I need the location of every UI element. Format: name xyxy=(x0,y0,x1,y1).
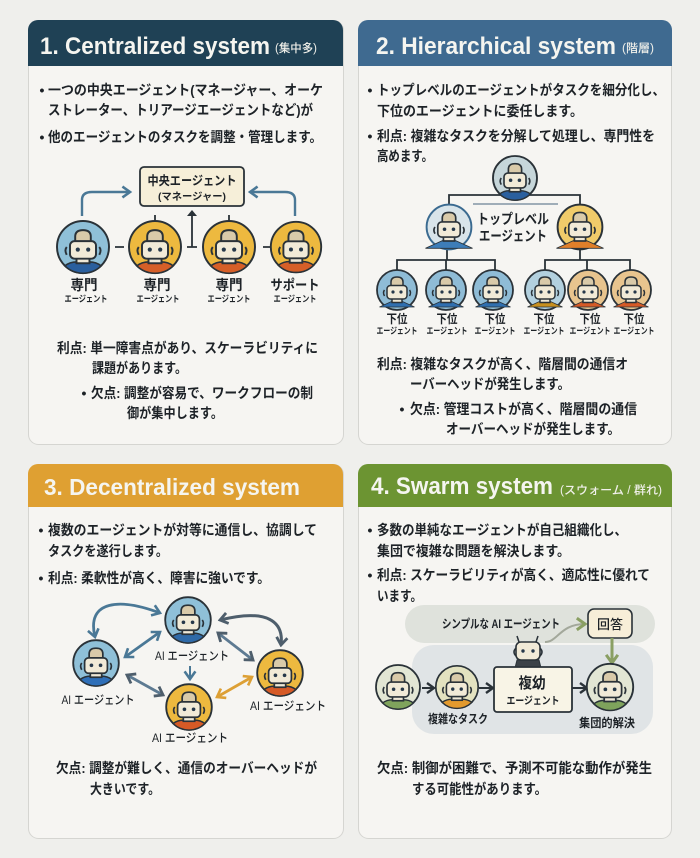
label: top level agent xyxy=(477,211,549,244)
text block: pros and cons: オーバーヘッドが発生します。 xyxy=(446,421,620,437)
label: top level agent: エージェント xyxy=(479,228,547,244)
text block: description: 複数のエージェントが対等に通信し、協調して xyxy=(48,522,317,538)
labels: agents xyxy=(64,277,320,304)
header: swarm system: 4. Swarm system xyxy=(371,473,553,500)
labels: agents: エージェント xyxy=(136,294,180,304)
label: simple agent: シンプルな AI エージェント xyxy=(442,617,560,631)
labels: task and solution xyxy=(428,711,635,730)
labels: agents: 専門 xyxy=(216,277,242,293)
text block: description: • xyxy=(368,128,373,144)
text block: cons: する可能性があります。 xyxy=(412,781,547,797)
labels: sub agents: 下位 xyxy=(534,311,554,326)
text block: pros and cons: 課題があります。 xyxy=(92,360,187,376)
text block: description xyxy=(368,82,665,164)
text block: description xyxy=(39,522,317,586)
panel: swarm system xyxy=(358,464,672,838)
text block: description: 利点: 複雑なタスクを分解して処理し、専門性を xyxy=(377,128,655,144)
icon: sub agent 5 xyxy=(568,270,608,310)
text block: pros and cons: 欠点: 調整が容易で、ワークフローの制 xyxy=(91,385,313,401)
panel: centralized system xyxy=(28,20,344,444)
text block: description: 下位のエージェントに委任します。 xyxy=(377,103,583,119)
arrow: box to solution xyxy=(572,687,587,689)
box: central agent xyxy=(140,167,244,206)
header: hierarchical system xyxy=(358,20,672,66)
icon: agent 1 xyxy=(57,221,109,273)
icon: agent 2 xyxy=(129,221,181,273)
labels: agents: AI エージェント xyxy=(250,699,326,713)
icon: top agent xyxy=(165,597,211,643)
icon: sub agent 1 xyxy=(377,270,417,310)
labels: agents: 専門 xyxy=(144,277,170,293)
labels: sub agents: 下位 xyxy=(484,311,506,326)
icon: small robot xyxy=(514,636,542,668)
text block: description: 高めます。 xyxy=(377,148,433,164)
header: hierarchical system: (階層) xyxy=(622,42,654,55)
text block: description: トップレベルのエージェントがタスクを細分化し、 xyxy=(377,82,665,98)
icon: mid agent yellow xyxy=(556,205,604,249)
icon: agent orange xyxy=(436,666,478,708)
text block: description: • xyxy=(40,129,45,145)
header: swarm system xyxy=(358,464,672,507)
text block: pros and cons: • xyxy=(82,385,87,401)
text block: cons: 欠点: 制御が困難で、予測不可能な動作が発生 xyxy=(377,760,652,776)
text block: description: 他のエージェントのタスクを調整・管理します。 xyxy=(48,129,322,145)
text block: pros and cons: 利点: 単一障害点があり、スケーラビリティに xyxy=(57,340,318,356)
labels: sub agents: 下位 xyxy=(580,311,600,326)
icon: left agent xyxy=(73,640,119,686)
arrow: curved right xyxy=(220,616,281,645)
diagram: peer to peer agents xyxy=(62,597,326,745)
text block: description: • xyxy=(39,570,44,586)
text block: description: 集団で複雑な問題を解決します。 xyxy=(377,543,570,559)
labels: agents: エージェント xyxy=(208,294,250,304)
header: centralized system xyxy=(28,20,343,66)
labels: sub agents: エージェント xyxy=(614,326,654,336)
box: complex agent: 複幼 xyxy=(518,675,546,692)
box: central agent: (マネージャー) xyxy=(158,191,226,203)
icon: agent 3 xyxy=(203,221,255,273)
panel: hierarchical system xyxy=(358,20,672,444)
box: answer: 回答 xyxy=(597,617,623,632)
header: centralized system: 1. Centralized system xyxy=(40,33,270,60)
text block: cons xyxy=(56,760,317,797)
text block: description: 多数の単純なエージェントが自己組織化し、 xyxy=(377,522,627,538)
labels: agents: エージェント xyxy=(274,294,316,304)
labels: task and solution: 集団的解決 xyxy=(579,715,635,730)
arrow: curved left xyxy=(94,604,160,637)
arrow: left to bottom xyxy=(127,675,163,695)
labels: agents: AI エージェント xyxy=(155,649,229,663)
text block: cons xyxy=(377,760,652,797)
background: upper band xyxy=(405,605,655,643)
text block: description: 一つの中央エージェント(マネージャー、オーケ xyxy=(48,82,323,98)
header: decentralized system xyxy=(28,464,343,507)
labels: sub agents: エージェント xyxy=(524,326,564,336)
icon: sub agent 2 xyxy=(426,270,466,310)
text block: description xyxy=(368,522,650,604)
labels: sub agents: エージェント xyxy=(570,326,610,336)
text block: description: • xyxy=(368,82,373,98)
header: swarm system: (スウォーム / 群れ) xyxy=(560,483,662,497)
arrow: task to box xyxy=(479,687,493,689)
text block: pros and cons xyxy=(377,356,637,437)
icon: agent 4 xyxy=(271,222,321,272)
arrow: right worker to manager xyxy=(250,192,295,216)
icon: mid agent blue xyxy=(425,205,473,249)
box: central agent: 中央エージェント xyxy=(148,173,236,188)
text block: description: • xyxy=(40,82,45,98)
labels: task and solution: 複雑なタスク xyxy=(428,711,488,726)
text block: description: • xyxy=(39,522,44,538)
background: lower band xyxy=(412,645,653,734)
text block: pros and cons: 利点: 複雑なタスクが高く、階層間の通信オ xyxy=(377,356,628,372)
labels: sub agents: 下位 xyxy=(436,311,458,326)
text block: cons: 欠点: 調整が難しく、通信のオーバーヘッドが xyxy=(56,760,317,776)
text block: description xyxy=(40,82,323,145)
text block: pros and cons: 欠点: 管理コストが高く、階層間の通信 xyxy=(410,401,637,417)
arrow: top to left xyxy=(125,632,160,657)
icon: bottom agent xyxy=(166,684,212,730)
text block: description: 利点: スケーラビリティが高く、適応性に優れて xyxy=(377,567,650,583)
text block: cons: 大きいです。 xyxy=(90,781,160,797)
arrow: agent to task xyxy=(422,687,434,689)
labels: sub agents xyxy=(376,311,654,336)
labels: sub agents: 下位 xyxy=(624,311,644,326)
text block: description: 利点: 柔軟性が高く、障害に強いです。 xyxy=(48,570,270,586)
icon: sub agent 6 xyxy=(611,270,651,310)
labels: agents: AI エージェント xyxy=(62,693,134,707)
labels: agents: サポート xyxy=(270,277,320,293)
text block: description: タスクを遂行します。 xyxy=(48,543,168,559)
labels: sub agents: エージェント xyxy=(474,326,516,336)
text block: pros and cons: 御が集中します。 xyxy=(127,405,223,421)
icon: right agent xyxy=(257,650,303,696)
diagram: agent hierarchy xyxy=(376,156,654,336)
header: decentralized system: 3. Decentralized system xyxy=(44,474,300,500)
labels: agents: 専門 xyxy=(70,277,98,293)
box: answer xyxy=(588,609,632,638)
labels: agents: AI エージェント xyxy=(152,731,228,745)
labels: sub agents: エージェント xyxy=(426,326,468,336)
arrow: answer to solution xyxy=(610,638,614,663)
diagram: swarm flow xyxy=(376,605,655,734)
box: complex agent: エージェント xyxy=(506,695,560,707)
text block: description: います。 xyxy=(377,588,422,604)
arrow: top to bottom xyxy=(189,666,191,679)
labels: sub agents: 下位 xyxy=(386,311,408,326)
icon: top agent xyxy=(493,156,537,200)
text block: description: • xyxy=(368,522,373,538)
panel: decentralized system xyxy=(28,464,344,838)
text block: description: ストレーター、トリアージエージェントなど)が xyxy=(48,102,313,118)
labels: agents: エージェント xyxy=(64,294,108,304)
text block: pros and cons: ーバーヘッドが発生します。 xyxy=(410,376,570,392)
text block: pros and cons: • xyxy=(400,401,405,417)
header: hierarchical system: 2. Hierarchical system xyxy=(376,33,616,60)
arrow: orange xyxy=(217,677,252,697)
labels: sub agents: エージェント xyxy=(376,326,418,336)
text block: pros and cons xyxy=(57,340,318,421)
icon: agent green xyxy=(376,665,420,709)
box: complex agent xyxy=(494,667,572,712)
labels: agents xyxy=(62,649,326,745)
arrow: centre up to manager xyxy=(187,210,197,247)
arrow: to answer xyxy=(545,624,585,642)
arrow: top to right xyxy=(218,633,253,660)
header: centralized system: (集中多) xyxy=(275,41,317,55)
icon: sub agent 3 xyxy=(473,270,513,310)
text block: description: • xyxy=(368,567,373,583)
diagram: central agent and workers xyxy=(57,167,321,304)
arrow: left worker to manager xyxy=(82,192,130,216)
icon: sub agent 4 xyxy=(525,270,565,310)
icon: agent solution xyxy=(587,664,633,710)
label: top level agent: トップレベル xyxy=(477,211,549,227)
